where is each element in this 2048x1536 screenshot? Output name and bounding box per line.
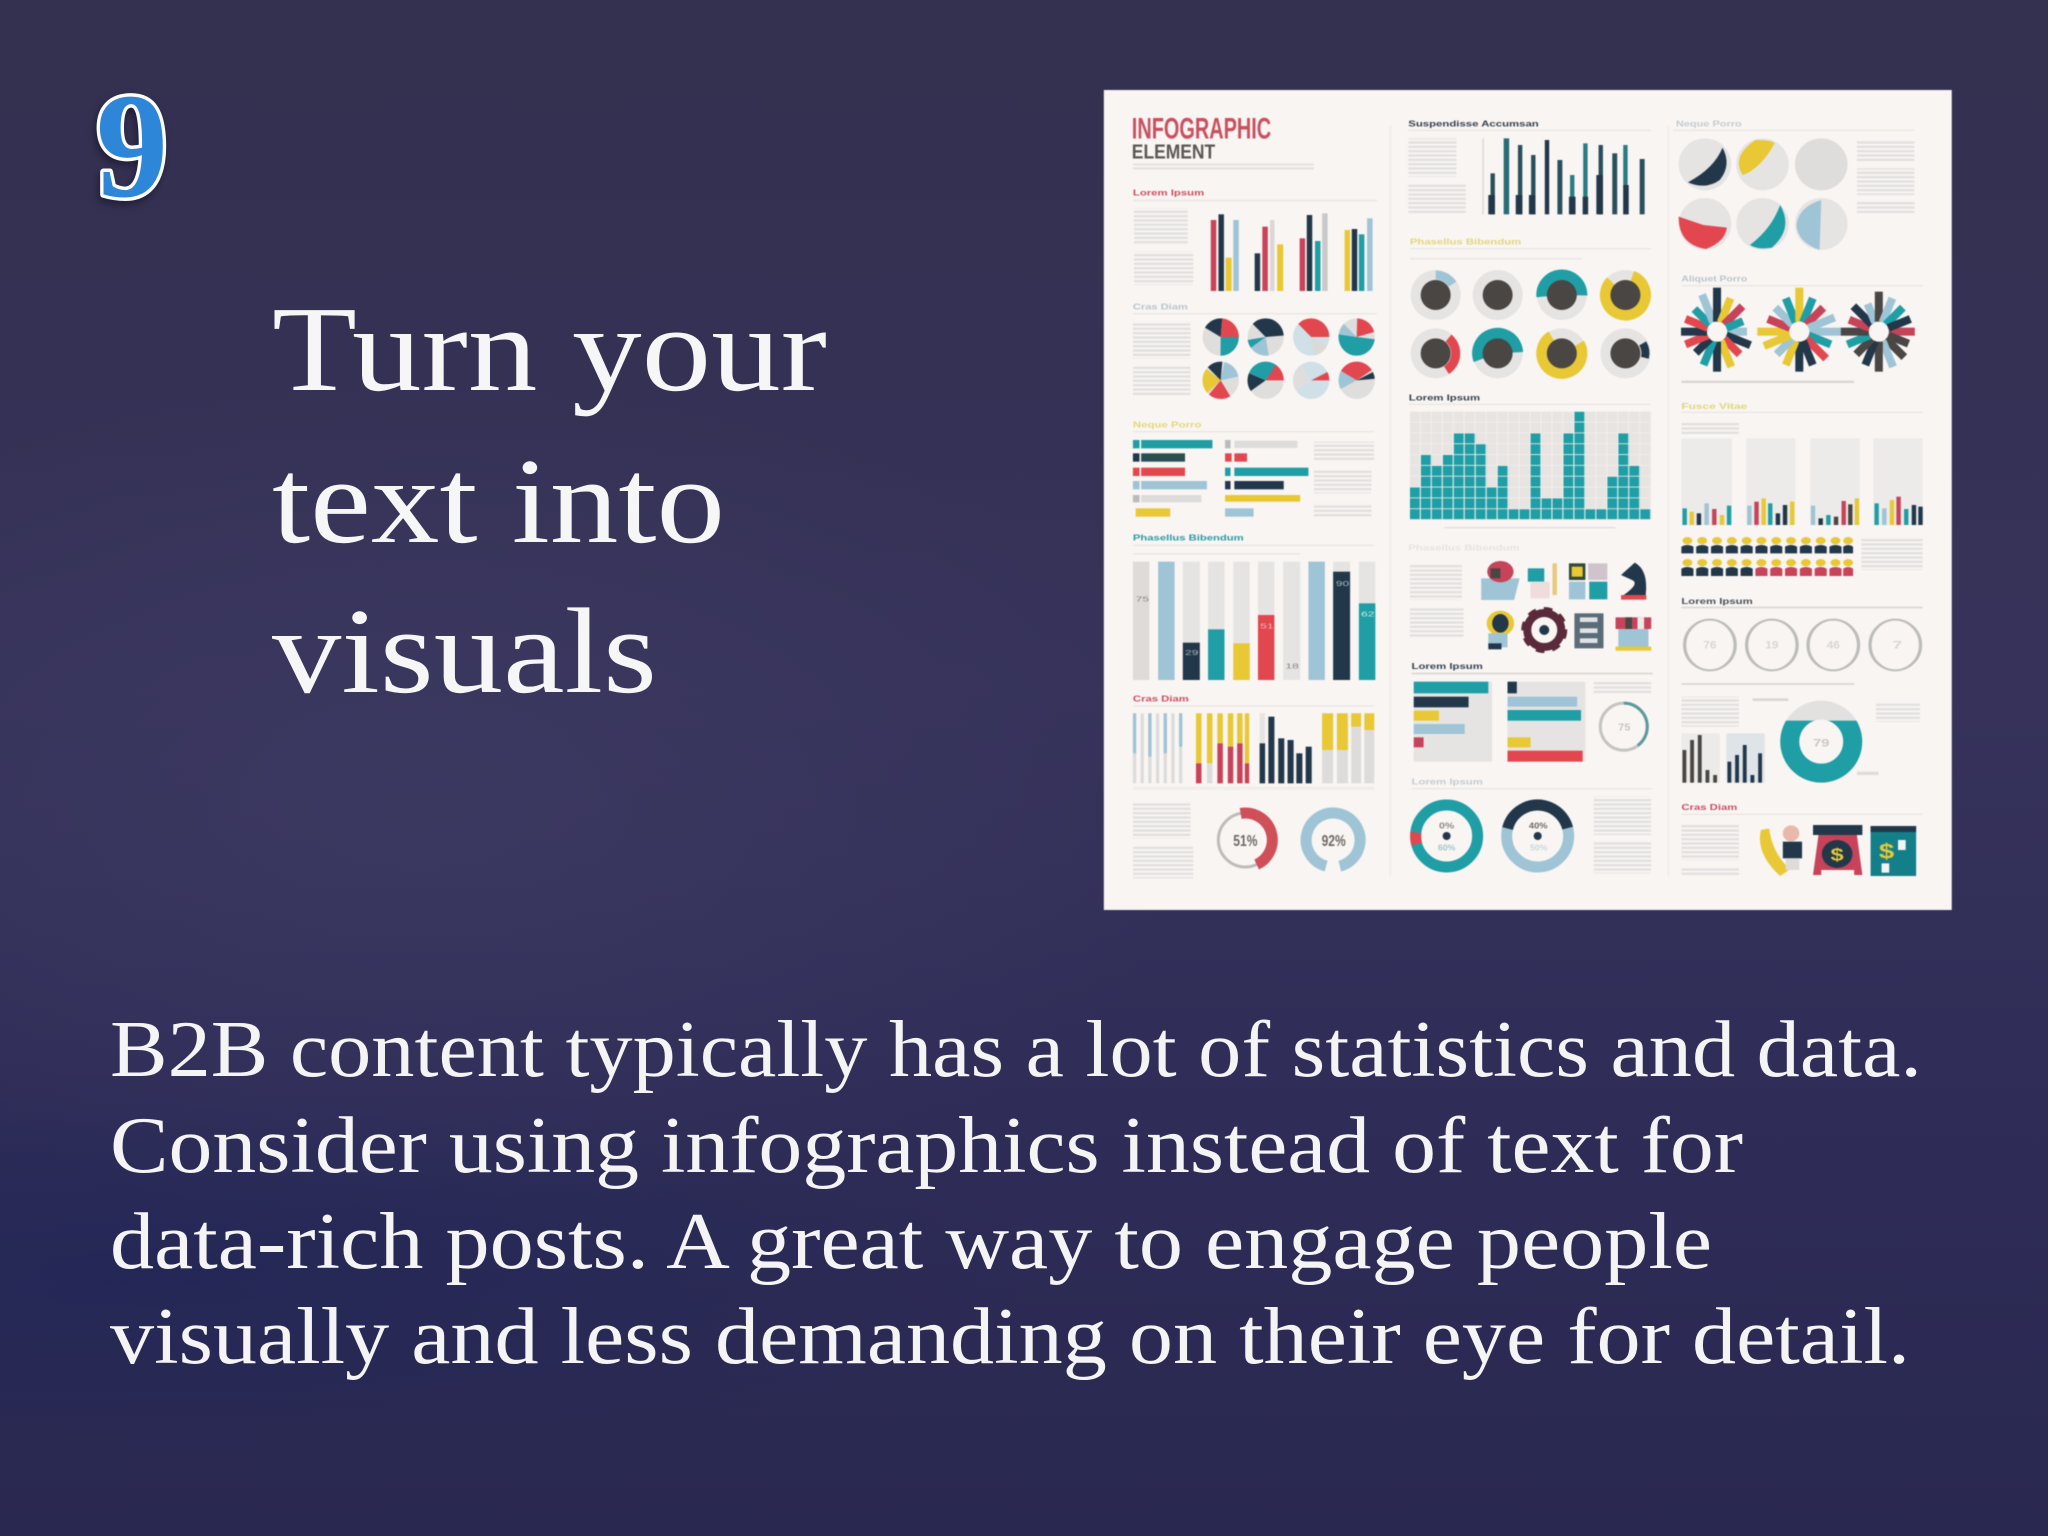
panel: infographic image	[1103, 89, 1952, 911]
tall bar chart: 62	[1361, 611, 1375, 619]
pie chart grid	[1133, 302, 1377, 399]
icon grid: finance: Phasellus Bibendum	[1408, 543, 1520, 553]
wedge pies: neque porro: Neque Porro	[1676, 119, 1742, 129]
tall bar chart	[1133, 533, 1375, 680]
grouped bar chart: Lorem Ipsum	[1133, 188, 1204, 198]
column chart: suspendisse accumsan	[1408, 119, 1651, 215]
outline rings: lorem ipsum: 19	[1765, 640, 1778, 652]
body text	[110, 1004, 1922, 1381]
outline rings: lorem ipsum: 76	[1703, 640, 1716, 652]
outline rings: lorem ipsum: 7	[1893, 640, 1902, 652]
icons: cras diam: Cras Diam	[1681, 803, 1737, 812]
title: Turn your	[272, 282, 827, 417]
horizontal bars: neque porro	[1133, 420, 1374, 517]
icon grid: finance	[1408, 543, 1651, 651]
pie chart grid: Cras Diam	[1133, 302, 1188, 312]
radial bursts: aliquet porro: Aliquet Porro	[1681, 274, 1747, 284]
histogram: Lorem Ipsum	[1409, 393, 1480, 403]
horizontal stacked bars: lorem ipsum: 75	[1618, 722, 1631, 733]
ring donuts: lorem ipsum: 0%	[1439, 821, 1455, 831]
ring donuts: lorem ipsum: 50%	[1530, 843, 1548, 853]
ring donuts: lorem ipsum: 40%	[1529, 821, 1548, 831]
tall bar chart: 90	[1336, 580, 1350, 588]
body text: visually and less demanding on their eye for detail.	[110, 1291, 1910, 1381]
histogram	[1409, 393, 1651, 528]
donut charts: 51% and 92%	[1133, 802, 1366, 878]
pictogram people rows	[1681, 537, 1923, 576]
title: text into	[272, 434, 725, 569]
big donut with small bars	[1681, 697, 1920, 783]
tall bar chart: 18	[1285, 662, 1299, 671]
wedge pies: neque porro	[1673, 119, 1914, 250]
body text: data-rich posts. A great way to engage people	[110, 1196, 1712, 1286]
ring donuts: lorem ipsum: 60%	[1438, 843, 1456, 853]
title	[272, 282, 827, 719]
tall bar chart: Phasellus Bibendum	[1133, 533, 1244, 543]
ring donuts: lorem ipsum: Lorem Ipsum	[1412, 777, 1483, 787]
donut charts: 51% and 92%: 92%	[1322, 833, 1346, 850]
number badge: 9: 9	[96, 63, 168, 229]
column chart: suspendisse accumsan: Suspendisse Accumsan	[1408, 119, 1539, 129]
body text: Consider using infographics instead of text for	[110, 1100, 1743, 1190]
radial bursts: aliquet porro	[1681, 274, 1923, 383]
tall bar chart: 75	[1136, 596, 1150, 604]
gauge donuts: phasellus bibendum: Phasellus Bibendum	[1410, 237, 1521, 247]
icons: cras diam: $	[1879, 840, 1894, 863]
title: visuals	[272, 584, 657, 719]
tall bar chart: 29	[1185, 649, 1199, 657]
small multiples: fusce vitae: Fusce Vitae	[1681, 402, 1748, 411]
outline rings: lorem ipsum: 46	[1827, 640, 1840, 652]
outline rings: lorem ipsum: Lorem Ipsum	[1681, 597, 1753, 606]
stacked bar charts: cras diam: Cras Diam	[1133, 694, 1189, 704]
outline rings: lorem ipsum	[1681, 597, 1923, 685]
donut charts: 51% and 92%: 51%	[1233, 833, 1257, 850]
heading: infographic element: ELEMENT	[1132, 140, 1215, 163]
stacked bar charts: cras diam	[1133, 694, 1374, 790]
heading: infographic element	[1132, 113, 1314, 170]
gauge donuts: phasellus bibendum	[1407, 237, 1653, 382]
ring donuts: lorem ipsum	[1409, 777, 1652, 874]
horizontal stacked bars: lorem ipsum	[1412, 662, 1653, 762]
big donut with small bars: 79	[1813, 737, 1829, 750]
body text: B2B content typically has a lot of statistics and data.	[110, 1004, 1922, 1094]
grouped bar chart	[1133, 188, 1377, 291]
icons: cras diam: $	[1831, 845, 1844, 864]
tall bar chart: 51	[1260, 622, 1274, 631]
small multiples: fusce vitae	[1681, 402, 1923, 525]
heading: infographic element: INFOGRAPHIC	[1132, 113, 1271, 145]
horizontal bars: neque porro: Neque Porro	[1133, 420, 1201, 430]
icons: cras diam	[1681, 803, 1923, 876]
horizontal stacked bars: lorem ipsum: Lorem Ipsum	[1412, 662, 1483, 671]
